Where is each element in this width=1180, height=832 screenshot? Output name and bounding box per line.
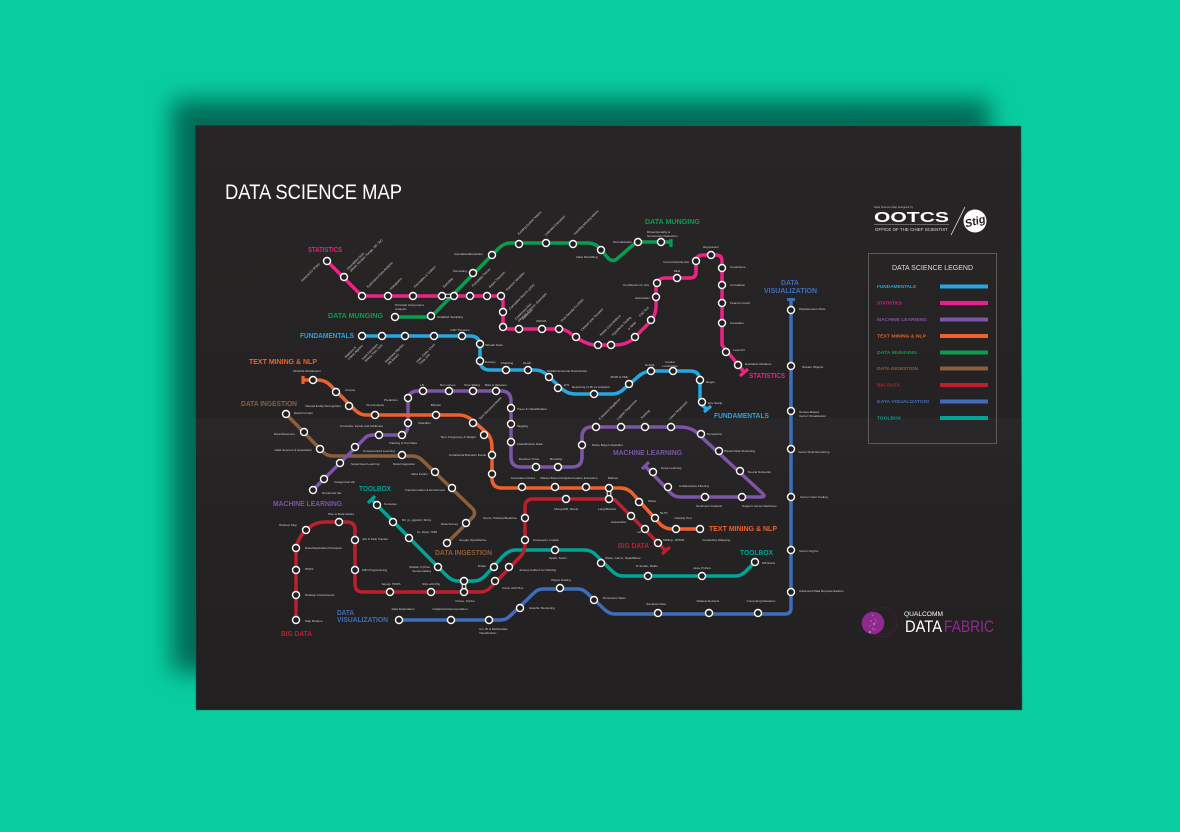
credit line: Data Science Map designed by	[874, 205, 913, 209]
big data labels: Hadoop Components	[305, 593, 335, 597]
munging labels: Stratified Sampling	[437, 315, 463, 319]
fundamentals labels: Binary Tree, O(n)	[364, 343, 383, 363]
visualization labels: Vector Visualization	[799, 414, 826, 418]
machine learning labels: Naive Bayes Classifier	[592, 443, 623, 447]
heading: data munging top: DATA MUNGING	[645, 217, 700, 226]
data wordmark: DATA	[905, 617, 943, 636]
toolbox labels: ss, Dplyr, Hdf5	[417, 530, 437, 534]
heading: text mining right: TEXT MINING & NLP	[709, 524, 777, 533]
toolbox labels: Java, Python	[693, 566, 711, 570]
fundamentals labels: Regex	[706, 380, 715, 384]
machine learning labels	[322, 383, 777, 508]
visualization labels: Graphical Representation	[432, 607, 468, 611]
machine learning labels: Over Fitting	[464, 383, 480, 387]
fundamentals labels: Reporting vs BI vs Analytics	[572, 385, 611, 389]
legend row: toolbox: TOOLBOX	[877, 416, 902, 420]
text mining labels: Mahout	[608, 476, 618, 480]
text mining labels	[293, 369, 730, 542]
big data labels: Sqoop: HDFS	[381, 582, 401, 586]
toolbox labels: MS Excel	[762, 561, 775, 565]
machine learning labels: Unsupervised Learning	[363, 449, 395, 453]
text mining labels: Named Entity Recognition	[305, 404, 341, 408]
text mining labels: Corpus	[345, 388, 355, 392]
stig badge: Stig	[964, 213, 987, 230]
munging labels: Analysis	[395, 307, 407, 311]
big data stations	[292, 484, 662, 624]
visualization labels: Vector Field Rendering	[798, 450, 830, 454]
legend row: text mining: TEXT MINING & NLP	[877, 334, 926, 338]
heading: statistics right: STATISTICS	[749, 371, 785, 380]
machine learning labels: Bias & Variance	[485, 383, 507, 387]
text mining labels: Dirichlet Distribution	[293, 369, 321, 373]
ingestion track	[286, 414, 474, 543]
poster shadow	[172, 100, 990, 672]
machine learning labels: Sentiment Analysis	[696, 504, 723, 508]
statistics labels: Covariance	[730, 265, 746, 269]
legend row: data ingestion	[877, 366, 988, 371]
big data labels: Flume, Scribe	[455, 599, 475, 603]
big data labels: M/R Programming	[362, 568, 387, 572]
big data labels: Hive & Data Nodes	[328, 512, 355, 516]
big data labels: SQL with Pig	[422, 582, 440, 586]
qualcomm wordmark: QUALCOMM	[904, 612, 943, 618]
big data labels: Job & Task Tracker	[362, 537, 388, 541]
metro line: data ingestion	[274, 410, 487, 546]
text mining track	[303, 380, 700, 529]
fundamentals labels: JSON & XML	[610, 375, 629, 379]
toolbox labels: Consoles	[384, 502, 397, 506]
toolbox end cap	[368, 496, 375, 503]
visualization labels: Dimension Stats	[603, 596, 626, 600]
statistics labels: Probability Theory	[471, 267, 492, 288]
visualization labels: Graphic Rendering	[529, 606, 555, 610]
text mining labels: Market Based Analysis	[540, 476, 572, 480]
text mining labels: NLTK	[660, 511, 669, 515]
visualization labels: Object Scaling	[551, 578, 571, 582]
toolbox labels: Spark, Storm	[549, 556, 567, 560]
statistics labels: Regression	[703, 245, 719, 249]
metro line: big data	[279, 484, 684, 624]
toolbox track	[372, 500, 755, 581]
ingestion labels: Data Formats	[294, 411, 313, 415]
machine learning labels: Neural Networks	[748, 470, 771, 474]
statistics labels: Estimation	[636, 296, 650, 300]
metro line: statistics	[300, 238, 772, 376]
machine learning stations	[310, 388, 746, 500]
legend row: fundamentals: FUNDAMENTALS	[877, 284, 916, 289]
visualization labels: Sampled Data	[646, 602, 666, 606]
machine learning track	[313, 391, 764, 497]
big data labels	[279, 507, 684, 623]
ootcs logo	[874, 205, 987, 235]
machine learning labels: Classifier	[418, 421, 431, 425]
munging labels: Data Scrubbing	[576, 255, 598, 259]
text mining labels: Conditional Random Fields	[449, 453, 486, 457]
legend row: statistics: STATISTICS	[877, 300, 902, 306]
visualization labels: Texture-Based	[799, 410, 819, 414]
legend row: data visualization: DATA VISUALIZATION	[877, 399, 930, 404]
poster panel	[195, 125, 1022, 710]
big data labels: Data Replication Principles	[305, 546, 342, 550]
heading: fundamentals right: FUNDAMENTALS	[714, 411, 769, 420]
legend row: machine learning	[877, 317, 988, 322]
statistics labels: Least Fit	[733, 348, 745, 352]
statistics labels: Correlation	[730, 283, 745, 287]
ingestion labels: Data Sources & Acquisition	[275, 448, 312, 452]
legend row: fundamentals	[877, 284, 988, 289]
machine learning labels: Prediction	[384, 398, 398, 402]
munging labels: Existing System Values	[517, 210, 543, 236]
fundamentals labels: Vendor	[665, 360, 675, 364]
munging labels: Numerosity Reduction	[647, 234, 678, 238]
machine learning labels: Trees & Classification	[517, 407, 547, 411]
text mining labels: Association Rules	[511, 476, 536, 480]
machine learning labels: Lift	[420, 383, 424, 387]
visualization labels: Data Exploration	[392, 607, 415, 611]
visualization labels: Displacement Plots	[799, 307, 826, 311]
legend row: big data: BIG DATA	[877, 382, 901, 388]
text mining labels: Term Document Matrix	[478, 396, 503, 421]
machine learning labels: Perceptron	[707, 432, 722, 436]
big data labels: nvl	[637, 530, 641, 534]
statistics labels: Exploratory Data Analysis	[366, 261, 394, 289]
metro line: data munging	[392, 209, 678, 320]
fundamentals labels: Env Setup	[708, 401, 723, 405]
legend row: data munging	[877, 350, 988, 355]
machine learning labels: Numerical Var	[322, 491, 341, 495]
statistics labels: Continuous Dist	[514, 302, 532, 321]
toolbox labels: R/I .js, ggplot2, Shiny	[402, 518, 432, 522]
machine learning labels: Roc curves	[440, 383, 456, 387]
fundamentals track	[362, 336, 708, 410]
big data labels: Oozie with Hive	[502, 586, 524, 590]
big data labels: Joining Outliers for Weblog	[519, 568, 556, 572]
metro line: data visualization	[392, 298, 844, 635]
fundamentals labels: Theta Join	[418, 352, 431, 366]
ingestion stations	[282, 410, 470, 546]
machine learning labels: Boosting	[550, 457, 562, 461]
statistics labels: Confidence Int (CI)	[623, 283, 649, 287]
visualization stations	[396, 306, 794, 624]
text mining labels: Feature Extraction	[572, 476, 598, 480]
toolbox labels	[384, 502, 775, 573]
heading: data visualization top: VISUALIZATION	[764, 286, 817, 295]
visualization end cap	[787, 298, 795, 301]
munging labels: Dimensionality &	[647, 230, 671, 234]
text mining end cap	[301, 376, 305, 384]
fundamentals stations	[358, 332, 706, 406]
visualization labels: Advanced Data Representations	[799, 589, 844, 593]
ingestion labels: Data Survey	[441, 522, 458, 526]
heading: fundamentals left: FUNDAMENTALS	[300, 331, 354, 340]
interchange connector centres	[464, 488, 609, 592]
statistics track	[327, 255, 744, 372]
statistics labels: (Normal, Poisson, Gaussian)	[517, 292, 548, 323]
big data labels: Cassandra	[611, 520, 626, 524]
statistics labels: Hypothesis Testing	[611, 315, 632, 337]
machine learning labels: Tagging	[517, 424, 528, 428]
statistics stations	[324, 252, 742, 368]
machine learning labels: Logistic Regression	[616, 399, 638, 421]
munging stations	[392, 238, 664, 320]
ingestion labels: Data Discovery	[274, 432, 295, 436]
interchange connector	[442, 294, 454, 298]
statistics labels: Euclidean Distance	[745, 362, 772, 366]
big data labels: HDFS	[305, 567, 313, 571]
text mining labels: BiGram	[431, 403, 442, 407]
munging labels: Imputation/Extraction	[454, 252, 483, 256]
visualization labels	[392, 307, 844, 635]
interchange connectors	[464, 488, 609, 592]
statistics end cap	[740, 369, 748, 376]
statistics labels: ANOVA	[536, 319, 548, 323]
heading: toolbox right: TOOLBOX	[740, 548, 773, 557]
statistics labels: Chi2 Test	[638, 306, 650, 318]
ootcs subtitle: OFFICE OF THE CHIEF SCIENTIST	[875, 227, 948, 232]
munging labels: Unlimited Extraction	[544, 214, 566, 237]
fabric wordmark: FABRIC	[944, 617, 994, 636]
heading: statistics left: STATISTICS	[308, 245, 342, 254]
legend row: big data	[877, 382, 988, 388]
munging labels	[395, 209, 678, 319]
visualization labels: Uni, Bi & Multivariate	[479, 627, 508, 631]
statistics labels: Bayes Theorem	[488, 270, 506, 289]
statistics labels: MLE	[674, 269, 680, 273]
data fabric logo	[862, 607, 994, 637]
toolbox labels: R Studio, Rattle	[636, 564, 658, 568]
toolbox labels: Matlab, Python,	[410, 565, 431, 569]
machine learning labels: Categorical Var	[334, 480, 355, 484]
fundamentals labels: ETL	[564, 383, 570, 387]
legend row: data visualization	[877, 399, 988, 404]
fundamentals labels: DB Basics	[387, 352, 400, 366]
line name headings	[241, 217, 817, 638]
munging labels: Handling Missing Values	[573, 209, 600, 236]
statistics labels: Causation	[730, 321, 744, 325]
ingestion labels	[274, 411, 487, 542]
statistics labels: Sampling	[442, 277, 454, 289]
machine learning labels: Ranking	[640, 409, 651, 420]
munging labels: Normalization	[613, 240, 632, 244]
fundamentals labels: NoSQL	[645, 363, 655, 367]
heading: data visualization left: VISUALIZATION	[337, 615, 388, 624]
munging track	[395, 242, 671, 317]
machine learning labels: Support Vector Machines	[742, 504, 777, 508]
fundamentals labels: Multidimensional Data Model	[547, 369, 587, 373]
heading: data visualization top: DATA	[781, 278, 800, 287]
fundamentals labels: Sharding	[501, 361, 513, 365]
big data track	[296, 499, 666, 620]
statistics labels: (Mean, Median, Range, SD, Var)	[349, 238, 383, 273]
fundamentals labels: Linear Algebra	[347, 344, 364, 361]
metro line: text mining and nlp	[293, 369, 730, 542]
fundamentals labels: Landscape	[662, 364, 678, 368]
ootcs wordmark: OOTCS	[874, 210, 949, 226]
statistics labels: Histograms	[389, 276, 403, 291]
heading: toolbox left: TOOLBOX	[359, 484, 391, 493]
logo slash	[951, 207, 965, 235]
machine learning labels: Training & Test Data	[389, 441, 417, 445]
statistics labels: p-Value	[627, 320, 637, 331]
visualization labels: Vector Color Coding	[800, 495, 828, 499]
fundamentals end cap	[704, 406, 711, 412]
heading: big data right: BIG DATA	[618, 541, 650, 550]
dotted halo	[867, 607, 897, 637]
statistics labels: Skewness	[521, 308, 534, 321]
fundamentals labels: Entropy	[485, 360, 496, 364]
visualization labels: Visualization	[479, 631, 497, 635]
big data labels: Storm, Hadoop/Realtime	[483, 516, 517, 520]
text mining labels: Classify Text	[674, 516, 692, 520]
fundamentals labels: Inner, Outer, Cross	[415, 342, 436, 364]
visualization labels: Computing Datastruc	[746, 599, 776, 603]
heading: big data left: BIG DATA	[281, 629, 313, 638]
statistics labels: Monte Carlo Method	[599, 314, 622, 337]
machine learning labels: Hierarchical Clustering	[724, 449, 755, 453]
statistics labels: Random Variables	[505, 271, 526, 292]
globe sparkles	[869, 614, 876, 633]
metro line: toolbox	[368, 496, 775, 581]
big data end cap	[662, 547, 670, 554]
machine learning labels: Concepts, Inputs and Attributes	[340, 424, 383, 428]
heading: data ingestion left: DATA INGESTION	[241, 399, 297, 408]
statistics labels: Descriptive Stats	[346, 251, 365, 271]
heading: data visualization left	[337, 608, 388, 624]
machine learning labels: Classification Rate	[517, 442, 543, 446]
text mining labels: Vocabulary Mapping	[702, 538, 730, 542]
fundamentals labels: CAP Theorem	[450, 328, 470, 332]
toolbox labels: Sensemaking	[412, 569, 431, 573]
statistics labels: Central Limit Theorem	[580, 307, 605, 332]
legend panel	[868, 254, 996, 444]
heading: machine learning left: MACHINE LEARNING	[273, 499, 342, 508]
machine learning end cap	[642, 462, 649, 469]
statistics labels	[300, 238, 772, 366]
visualization track	[399, 300, 791, 620]
metro line: machine learning	[310, 383, 777, 508]
legend row: text mining	[877, 334, 988, 338]
fundamentals labels	[344, 328, 723, 405]
legend title: DATA SCIENCE LEGEND	[892, 265, 973, 272]
heading: machine learning right: MACHINE LEARNING	[613, 448, 682, 457]
fundamentals labels: OLAP	[523, 361, 531, 365]
fundamentals labels: Tabular Data	[485, 343, 503, 347]
munging labels: Denoising	[453, 269, 467, 273]
heading: data visualization left: DATA	[337, 608, 355, 617]
visualization labels: Dataset Extracts	[697, 599, 720, 603]
fundamentals labels: Hash Functions	[361, 342, 379, 361]
title: DATA SCIENCE MAP	[225, 181, 402, 204]
machine learning labels: Linear Regression	[668, 400, 689, 421]
statistics labels: Percentiles & Outliers	[413, 265, 437, 289]
statistics labels: Kernel Density Est	[664, 260, 689, 264]
metro line: fundamentals	[344, 328, 723, 412]
legend row: toolbox	[877, 416, 988, 420]
text mining labels: Weka	[648, 499, 656, 503]
logo rule	[874, 223, 949, 226]
ingestion labels: Data Integration	[393, 462, 415, 466]
statistics labels: Pearson Coeff	[730, 301, 750, 305]
machine learning labels: K-Nearest Neighbour	[598, 397, 621, 421]
heading: data visualization top	[764, 278, 817, 295]
text mining labels: Text Analysis	[366, 403, 384, 407]
fundamentals labels: Relational Algebra,	[384, 342, 405, 364]
statistics labels: Cumulative Dist Fn (CDF)	[508, 283, 536, 311]
legend row: data munging: DATA MUNGING	[877, 350, 917, 355]
heading: data munging left: DATA MUNGING	[328, 311, 383, 320]
machine learning labels: Decision Trees	[519, 457, 540, 461]
heading: text mining left: TEXT MINING & NLP	[249, 357, 317, 366]
machine learning labels: Deep Learning	[661, 466, 682, 470]
big data labels: MRExp, RHIPE	[663, 538, 684, 542]
statistics labels: General EU Sharp	[300, 262, 321, 283]
legend row: data ingestion: DATA INGESTION	[877, 366, 919, 371]
big data labels: Zookeeper, Impala	[533, 538, 559, 542]
legend row: statistics	[877, 300, 988, 306]
ingestion labels: Transformation & Enrichment	[405, 488, 445, 492]
big data labels: MongoDB, Neo4j	[554, 507, 578, 511]
machine learning labels: Collaborative Filtering	[679, 484, 709, 488]
legend row: machine learning: MACHINE LEARNING	[877, 317, 927, 322]
heading: data ingestion bottom: DATA INGESTION	[435, 548, 492, 557]
visualization labels: Stream Objects	[802, 365, 824, 369]
munging end cap	[669, 239, 673, 247]
big data labels: Hadoop Stop	[279, 523, 297, 527]
big data labels: Map Reduce	[305, 619, 323, 623]
purple globe	[862, 612, 884, 634]
big data labels: Lang/Mahout	[598, 507, 616, 511]
ingestion labels: Google OpenRefine	[459, 538, 487, 542]
toolbox stations	[374, 502, 758, 580]
munging labels: Principal Component	[395, 303, 424, 307]
text mining stations	[310, 376, 704, 532]
fundamentals labels: Matrices &	[344, 345, 358, 359]
statistics labels: Prob Density Fn (PDF)	[560, 298, 585, 323]
machine learning labels: Supervised Learning	[351, 462, 380, 466]
visualization labels: Vector Glyphs	[799, 549, 819, 553]
text mining labels: Term Frequency & Weight	[440, 435, 476, 439]
toolbox labels: Drake	[478, 564, 486, 568]
ingestion labels: Data Fusion	[411, 472, 428, 476]
toolbox labels: Weka, Carrot, RapidMiner	[605, 556, 641, 560]
legend box	[868, 254, 996, 444]
